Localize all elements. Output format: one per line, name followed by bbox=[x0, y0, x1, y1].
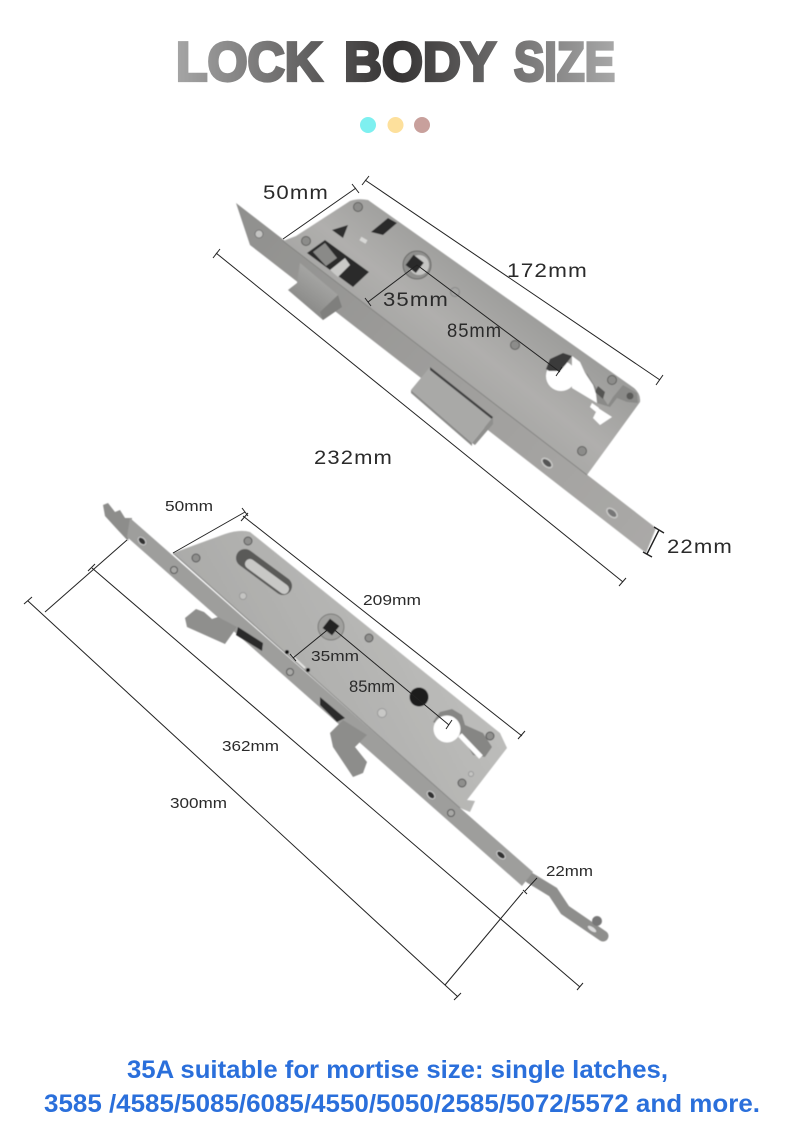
lock body one: single latch bbox=[236, 199, 656, 553]
label 50mm: 50mm bbox=[263, 182, 329, 204]
title: BODY bbox=[344, 30, 496, 92]
label 300mm: 300mm bbox=[170, 795, 227, 812]
lock body two measurements bbox=[165, 498, 593, 880]
tail bottom bbox=[530, 878, 603, 936]
faceplate strip bbox=[236, 203, 656, 553]
decorative three dots bbox=[360, 117, 430, 133]
label 22mm: 22mm bbox=[667, 536, 733, 558]
body plate bbox=[283, 199, 640, 475]
latch window bbox=[307, 240, 369, 287]
label 35mm: 35mm bbox=[383, 289, 449, 311]
lock body one dimension lines bbox=[213, 176, 664, 586]
latch bolt bbox=[288, 263, 342, 320]
cylinder cutout bbox=[433, 709, 492, 757]
title: SIZE bbox=[514, 30, 615, 92]
triangle cutout bbox=[332, 225, 348, 238]
title: LOCK bbox=[176, 30, 322, 92]
dead bolt bbox=[411, 367, 493, 446]
lower hook bbox=[320, 697, 367, 777]
upper hook bbox=[185, 609, 263, 651]
body plate bbox=[173, 531, 507, 812]
title bbox=[176, 30, 615, 92]
label 209mm: 209mm bbox=[363, 592, 421, 609]
label 85mm: 85mm bbox=[447, 321, 502, 342]
long slot bbox=[245, 558, 284, 589]
small slot bbox=[371, 218, 397, 235]
center latch dots bbox=[285, 650, 310, 672]
lock body two dimension lines bbox=[24, 508, 583, 1000]
label 172mm: 172mm bbox=[507, 260, 588, 282]
faceplate holes bbox=[540, 456, 619, 520]
footer note bbox=[44, 1056, 760, 1118]
screws bbox=[255, 202, 616, 456]
cylinder cutout bbox=[546, 353, 638, 425]
label 22mm: 22mm bbox=[546, 863, 593, 880]
label 85mm: 85mm bbox=[349, 678, 395, 696]
screws bbox=[170, 537, 494, 816]
label 35mm: 35mm bbox=[311, 648, 359, 665]
small oval hole bbox=[410, 688, 428, 706]
label 232mm: 232mm bbox=[314, 447, 393, 469]
lock body two: multi-point hooks bbox=[103, 503, 603, 936]
faceplate strip bbox=[127, 518, 533, 886]
faceplate holes bbox=[137, 536, 507, 861]
label 50mm: 50mm bbox=[165, 498, 213, 515]
label 362mm: 362mm bbox=[222, 738, 279, 755]
footer line one: 35A suitable for mortise size: single latches, bbox=[127, 1056, 668, 1084]
tail top bbox=[103, 503, 132, 541]
lock body one measurements bbox=[263, 182, 733, 558]
footer line two: 3585 /4585/5085/6085/4550/5050/2585/5072/5572 and more. bbox=[44, 1090, 760, 1118]
spindle hole bbox=[403, 251, 431, 279]
spindle hole bbox=[318, 614, 344, 640]
